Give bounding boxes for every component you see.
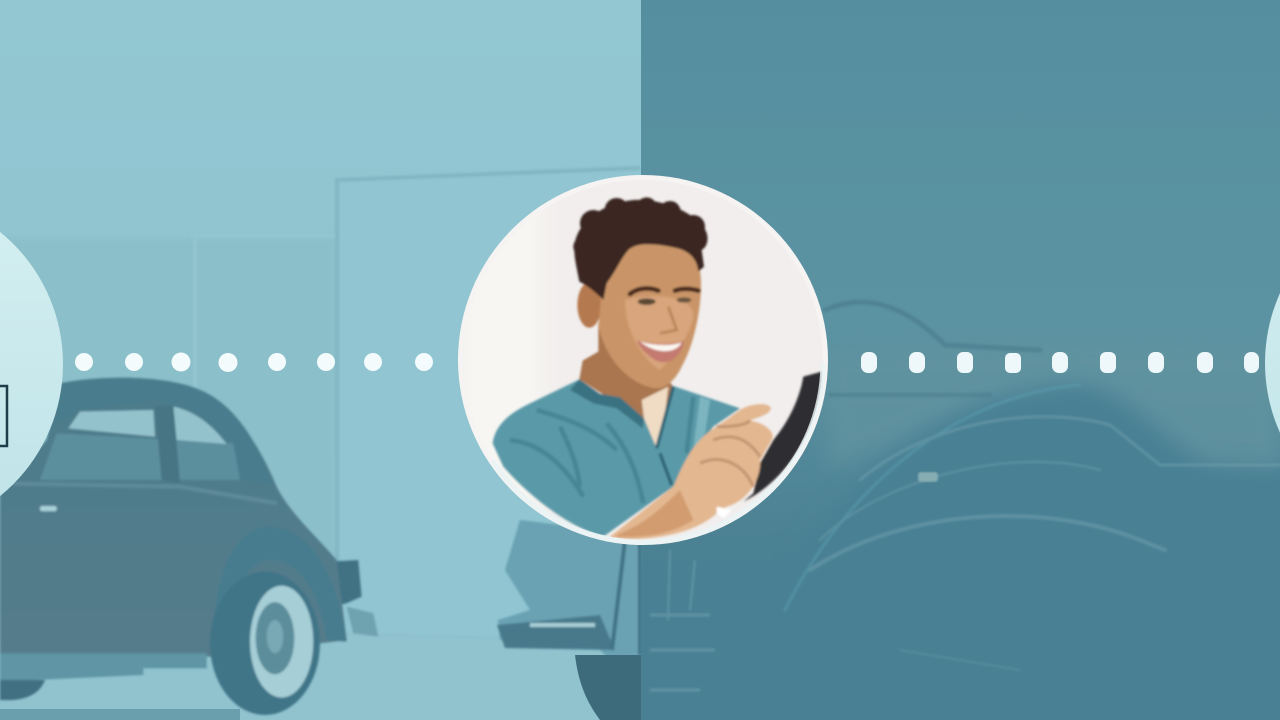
- eyebrows: [630, 288, 698, 294]
- shirt placket: [657, 387, 673, 485]
- illustration: car front behind portrait: [497, 520, 641, 720]
- rear window: [68, 410, 155, 437]
- door trim: [0, 483, 277, 503]
- dotted line: left: [75, 352, 433, 372]
- shirt highlight: [693, 397, 710, 450]
- car front fill: [498, 520, 640, 655]
- garage back wall: [0, 238, 335, 640]
- tablet: [743, 372, 822, 502]
- side window: [173, 407, 227, 444]
- panel: light left background: [0, 0, 641, 720]
- eyes: [638, 298, 656, 305]
- portrait background: [463, 180, 823, 540]
- portrait ring: [458, 175, 828, 545]
- blurred car lower mass: [896, 382, 1280, 498]
- rear tyre: [210, 572, 320, 715]
- cheek light: [625, 296, 693, 370]
- front tyre: [575, 655, 641, 720]
- solid car base: [641, 620, 1280, 720]
- running board: [0, 653, 207, 682]
- neck: [578, 324, 674, 419]
- nose shade: [660, 307, 677, 333]
- white wall: [250, 586, 313, 698]
- bumper blob: [347, 607, 378, 637]
- rear bumper: [336, 558, 363, 606]
- window pillar: [158, 409, 180, 482]
- blurred car band: [832, 376, 1276, 462]
- bumper: [497, 615, 615, 650]
- mouth: [637, 341, 684, 362]
- forearm shade: [617, 490, 693, 537]
- portrait inner edge: [492, 362, 823, 542]
- small car highlight: [918, 472, 938, 482]
- hair: [573, 197, 708, 300]
- hub cap: [256, 602, 294, 674]
- teeth: [640, 342, 682, 351]
- shirt: [493, 379, 740, 537]
- front wheel: [0, 680, 45, 700]
- ear: [577, 282, 601, 328]
- rear fender: [213, 527, 347, 650]
- portrait: smiling man with tablet: [458, 175, 828, 545]
- shirt folds: [510, 397, 693, 503]
- face: [598, 238, 701, 388]
- car body and roof: [0, 378, 347, 657]
- roof band: [214, 397, 250, 437]
- collar shadow: [570, 379, 644, 428]
- dotted line: right: [861, 352, 1259, 373]
- panel: dark right background: [641, 168, 1280, 720]
- windshield strut: [612, 540, 640, 655]
- right step circle: [1265, 193, 1280, 533]
- icon: cropped outlined box: [0, 386, 7, 446]
- cabin interior: [40, 433, 240, 480]
- illustration: classic car on the left: [0, 378, 378, 715]
- garage door panel: [335, 168, 640, 642]
- finger lines: [700, 421, 760, 487]
- car contour lines: [784, 300, 1280, 610]
- arm and hand: [610, 404, 773, 539]
- left step circle: [0, 194, 63, 534]
- garage floor: [0, 635, 640, 720]
- car details below portrait: [650, 550, 715, 690]
- cuff highlight: [717, 507, 732, 518]
- open shirt chest: [642, 387, 668, 448]
